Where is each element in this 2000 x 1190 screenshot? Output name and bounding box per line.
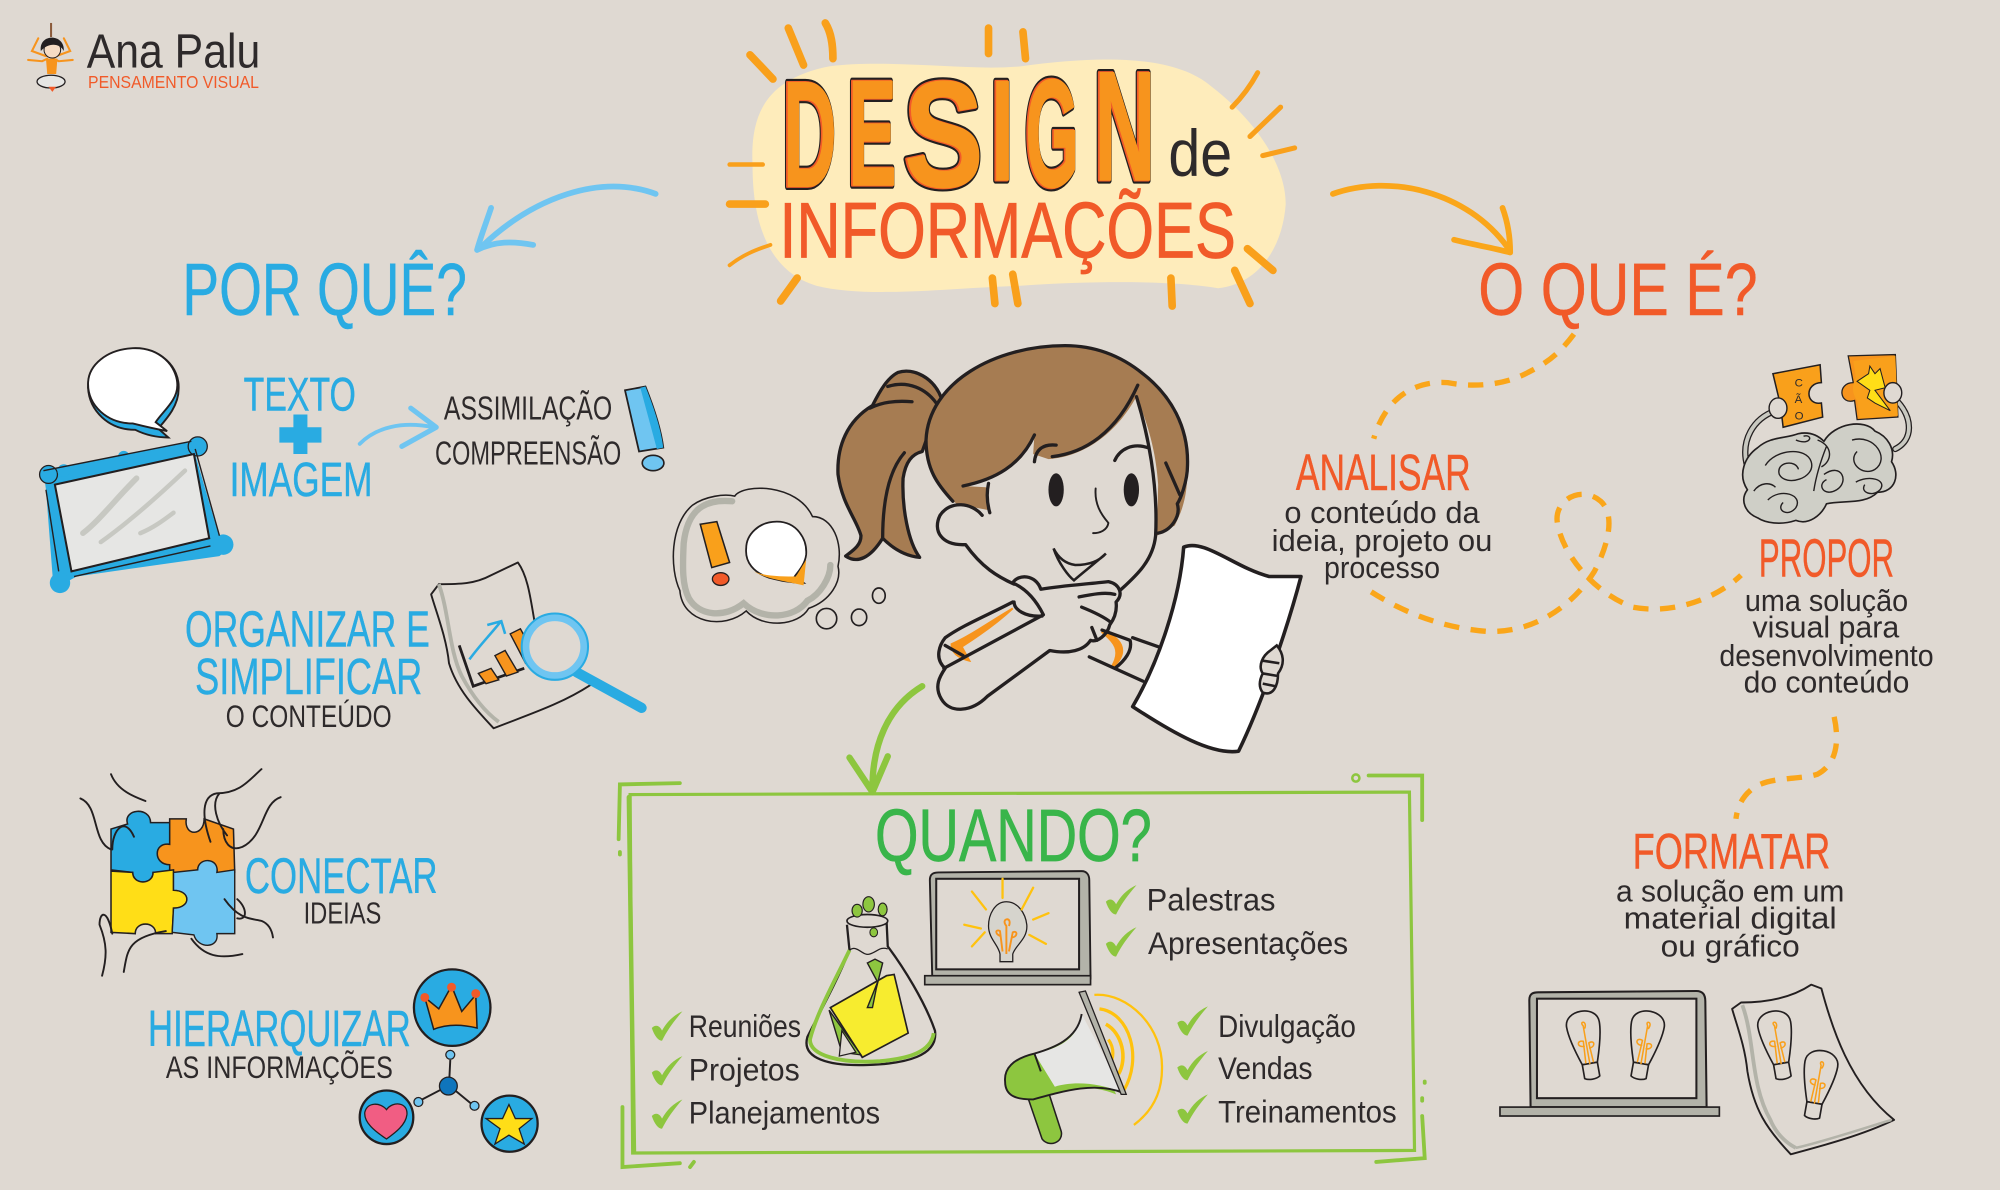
brain arms bbox=[1745, 400, 1909, 467]
icon: megaphone bbox=[1005, 991, 1162, 1144]
checklist: Divulgação bbox=[1177, 1006, 1356, 1044]
label: CONECTAR: CONECTAR bbox=[245, 848, 438, 904]
title word: DESIGN outline bbox=[782, 39, 1154, 219]
label: ORGANIZAR E: ORGANIZAR E bbox=[185, 601, 430, 658]
heading: O QUE É?: O QUE É? bbox=[1478, 248, 1758, 331]
checklist: Divulgação: Divulgação bbox=[1218, 1008, 1356, 1044]
white speech bubble bbox=[746, 522, 806, 583]
icon: brain with puzzle pieces: C bbox=[1795, 377, 1803, 389]
panel: por quê bbox=[40, 248, 664, 1152]
icon: brain with puzzle pieces: Ã bbox=[1795, 393, 1803, 406]
label: AS INFORMAÇÕES: AS INFORMAÇÕES bbox=[166, 1049, 393, 1085]
nose bbox=[1093, 488, 1108, 533]
title word: DESIGN shade: I bbox=[990, 52, 1013, 211]
title word: DESIGN: I bbox=[991, 52, 1014, 211]
panel: o que é bbox=[1272, 248, 1934, 1154]
checklist: Palestras: Palestras bbox=[1147, 882, 1275, 918]
dashed path 2 bbox=[1371, 494, 1741, 631]
checklist: Reuniões: Reuniões bbox=[689, 1008, 801, 1044]
label: IMAGEM: IMAGEM bbox=[230, 453, 372, 507]
title word: DESIGN: G bbox=[1026, 48, 1079, 219]
title word: DESIGN outline: N bbox=[1093, 39, 1154, 213]
puzzle piece: right bbox=[1842, 355, 1898, 420]
title block bbox=[730, 23, 1295, 306]
text: formatar description: material digital bbox=[1624, 902, 1837, 936]
checklist: Treinamentos: Treinamentos bbox=[1218, 1093, 1397, 1129]
label: TEXTO: TEXTO bbox=[244, 369, 356, 422]
icon: flask bbox=[807, 897, 935, 1065]
title word: DESIGN outline: G bbox=[1024, 48, 1078, 219]
label: SIMPLIFICAR: SIMPLIFICAR bbox=[195, 648, 422, 705]
title word: DESIGN outline: S bbox=[903, 50, 982, 218]
icon: laptop with bulbs bbox=[1500, 991, 1719, 1116]
arrow: to O que é bbox=[1333, 186, 1510, 253]
logo: Ana Palu bbox=[28, 23, 260, 92]
face outline bbox=[926, 346, 1188, 591]
icon: chart paper with magnifier bbox=[431, 562, 642, 728]
title word: DESIGN: E bbox=[848, 49, 897, 217]
icon: paper with bulbs bbox=[1732, 985, 1894, 1154]
eyes bbox=[1048, 473, 1064, 506]
title word: DESIGN shade: S bbox=[903, 50, 982, 218]
title word: DESIGN outline: I bbox=[990, 52, 1013, 211]
thought bubble bbox=[673, 488, 885, 629]
text: propor description: uma solução bbox=[1745, 584, 1908, 618]
panel: quando bbox=[619, 774, 1425, 1167]
label: PROPOR: PROPOR bbox=[1759, 530, 1894, 589]
title word: DESIGN shade: G bbox=[1024, 48, 1078, 219]
character: girl reading bbox=[673, 346, 1301, 752]
label: ASSIMILAÇÃO: ASSIMILAÇÃO bbox=[444, 390, 612, 428]
icon: picture frame bbox=[40, 437, 233, 593]
icon: laptop with bulb bbox=[925, 871, 1091, 985]
exclamation bbox=[700, 522, 730, 568]
box frame bbox=[619, 774, 1425, 1167]
label: FORMATAR: FORMATAR bbox=[1633, 824, 1830, 880]
label: HIERARQUIZAR: HIERARQUIZAR bbox=[148, 1000, 411, 1057]
checklist: Vendas: Vendas bbox=[1218, 1050, 1312, 1086]
sleeves bbox=[952, 608, 1013, 661]
icon: hierarchy diagram bbox=[360, 969, 538, 1152]
checklist: Planejamentos: Planejamentos bbox=[689, 1095, 880, 1131]
hair bbox=[926, 346, 1187, 536]
thought circles bbox=[816, 608, 837, 629]
text: analisar description: processo bbox=[1324, 551, 1440, 585]
title word: DESIGN shade bbox=[782, 39, 1154, 219]
label: IDEIAS: IDEIAS bbox=[304, 896, 381, 930]
text: propor description: desenvolvimento bbox=[1719, 639, 1934, 673]
logo tagline: PENSAMENTO VISUAL bbox=[88, 72, 259, 92]
mouth bbox=[1054, 548, 1106, 580]
ear and jaw bbox=[937, 505, 1014, 584]
held paper bbox=[1133, 545, 1301, 752]
icon: meditating figure bbox=[28, 23, 73, 92]
title word: DESIGN: S bbox=[904, 50, 983, 218]
arrow: result bbox=[360, 408, 436, 446]
text: analisar description: ideia, projeto ou bbox=[1272, 524, 1492, 558]
title word: DESIGN shade: E bbox=[847, 49, 895, 217]
title word: INFORMAÇÕES: INFORMAÇÕES bbox=[779, 186, 1236, 275]
title word: DESIGN shade: D bbox=[782, 50, 835, 218]
brain body bbox=[1743, 424, 1896, 523]
checklist: Reuniões bbox=[652, 1008, 801, 1044]
icon: plus bbox=[279, 415, 321, 454]
fingers on paper bbox=[1260, 645, 1283, 693]
dashed path 1 bbox=[1374, 334, 1574, 439]
title word: DESIGN shade: N bbox=[1093, 39, 1154, 213]
title word: DESIGN: N bbox=[1094, 39, 1156, 213]
checklist: Projetos: Projetos bbox=[689, 1051, 800, 1087]
text: propor description bbox=[1719, 584, 1934, 700]
checklist: Apresentações: Apresentações bbox=[1148, 925, 1348, 961]
text: propor description: do conteúdo bbox=[1744, 666, 1909, 700]
icon: brain with puzzle pieces bbox=[1743, 355, 1909, 523]
icon: brain with puzzle pieces: O bbox=[1795, 411, 1804, 423]
puzzle piece: left bbox=[1773, 365, 1823, 427]
title word: DESIGN: D bbox=[783, 50, 837, 218]
text: analisar description: o conteúdo da bbox=[1284, 496, 1481, 530]
brain hands bbox=[1769, 398, 1787, 418]
arm and hand bbox=[938, 577, 1158, 709]
title word: de: de bbox=[1168, 117, 1232, 191]
label: ANALISAR: ANALISAR bbox=[1296, 444, 1471, 501]
title word: DESIGN bbox=[783, 39, 1156, 219]
arrow: to Quando bbox=[849, 686, 922, 792]
text: formatar description: ou gráfico bbox=[1661, 930, 1800, 964]
title rays bbox=[730, 23, 1295, 306]
ponytail bbox=[838, 371, 941, 559]
heading: QUANDO?: QUANDO? bbox=[875, 794, 1152, 877]
logo name: Ana Palu bbox=[87, 25, 260, 79]
dashed path 3 bbox=[1736, 717, 1837, 819]
label: COMPREENSÃO: COMPREENSÃO bbox=[435, 434, 621, 472]
text: propor description: visual para bbox=[1753, 611, 1900, 645]
text: formatar description: a solução em um bbox=[1616, 875, 1844, 909]
icon: puzzle with hands bbox=[80, 769, 281, 976]
label: O CONTEÚDO: O CONTEÚDO bbox=[226, 698, 392, 734]
heading: POR QUÊ?: POR QUÊ? bbox=[182, 248, 467, 331]
title blob bbox=[752, 60, 1286, 292]
title word: DESIGN outline: E bbox=[847, 49, 895, 217]
text: formatar description bbox=[1616, 875, 1844, 964]
icon: exclamation bbox=[625, 386, 664, 471]
checklist: Vendas bbox=[1177, 1050, 1312, 1086]
arrow: to Por quê bbox=[477, 187, 656, 250]
text: analisar description bbox=[1272, 496, 1492, 585]
title word: DESIGN outline: D bbox=[782, 50, 835, 218]
icon: speech bubble bbox=[88, 348, 179, 437]
